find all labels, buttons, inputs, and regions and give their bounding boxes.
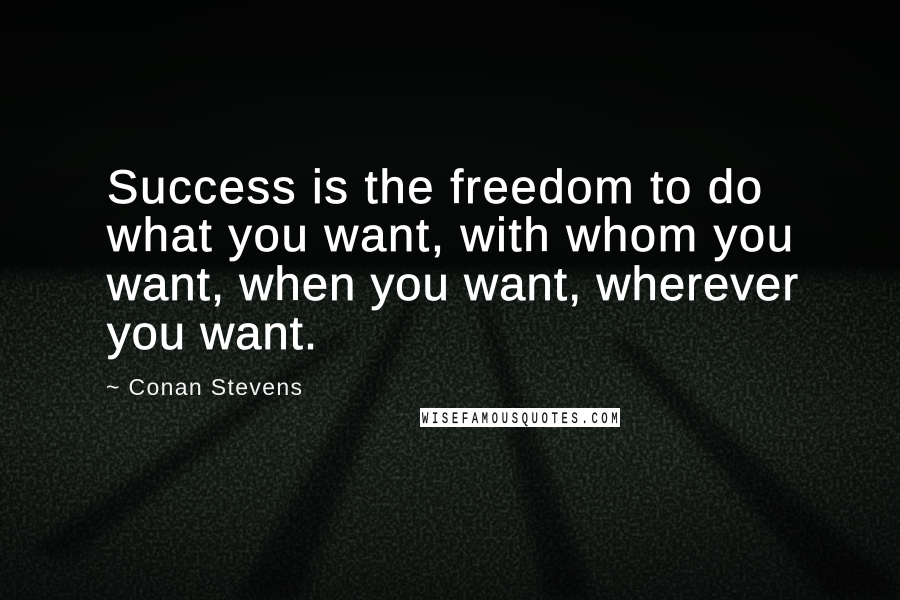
quote text: you want.: [107, 306, 317, 359]
quote text: [106, 160, 798, 359]
quote text: what you want, with whom you: [106, 208, 793, 261]
quote text: Success is the freedom to do: [107, 160, 762, 213]
author attribution: ~ Conan Stevens: [106, 374, 302, 400]
quote text: want, when you want, wherever: [106, 257, 798, 310]
watermark: WISEFAMOUSQUOTES.COM: [422, 411, 618, 429]
